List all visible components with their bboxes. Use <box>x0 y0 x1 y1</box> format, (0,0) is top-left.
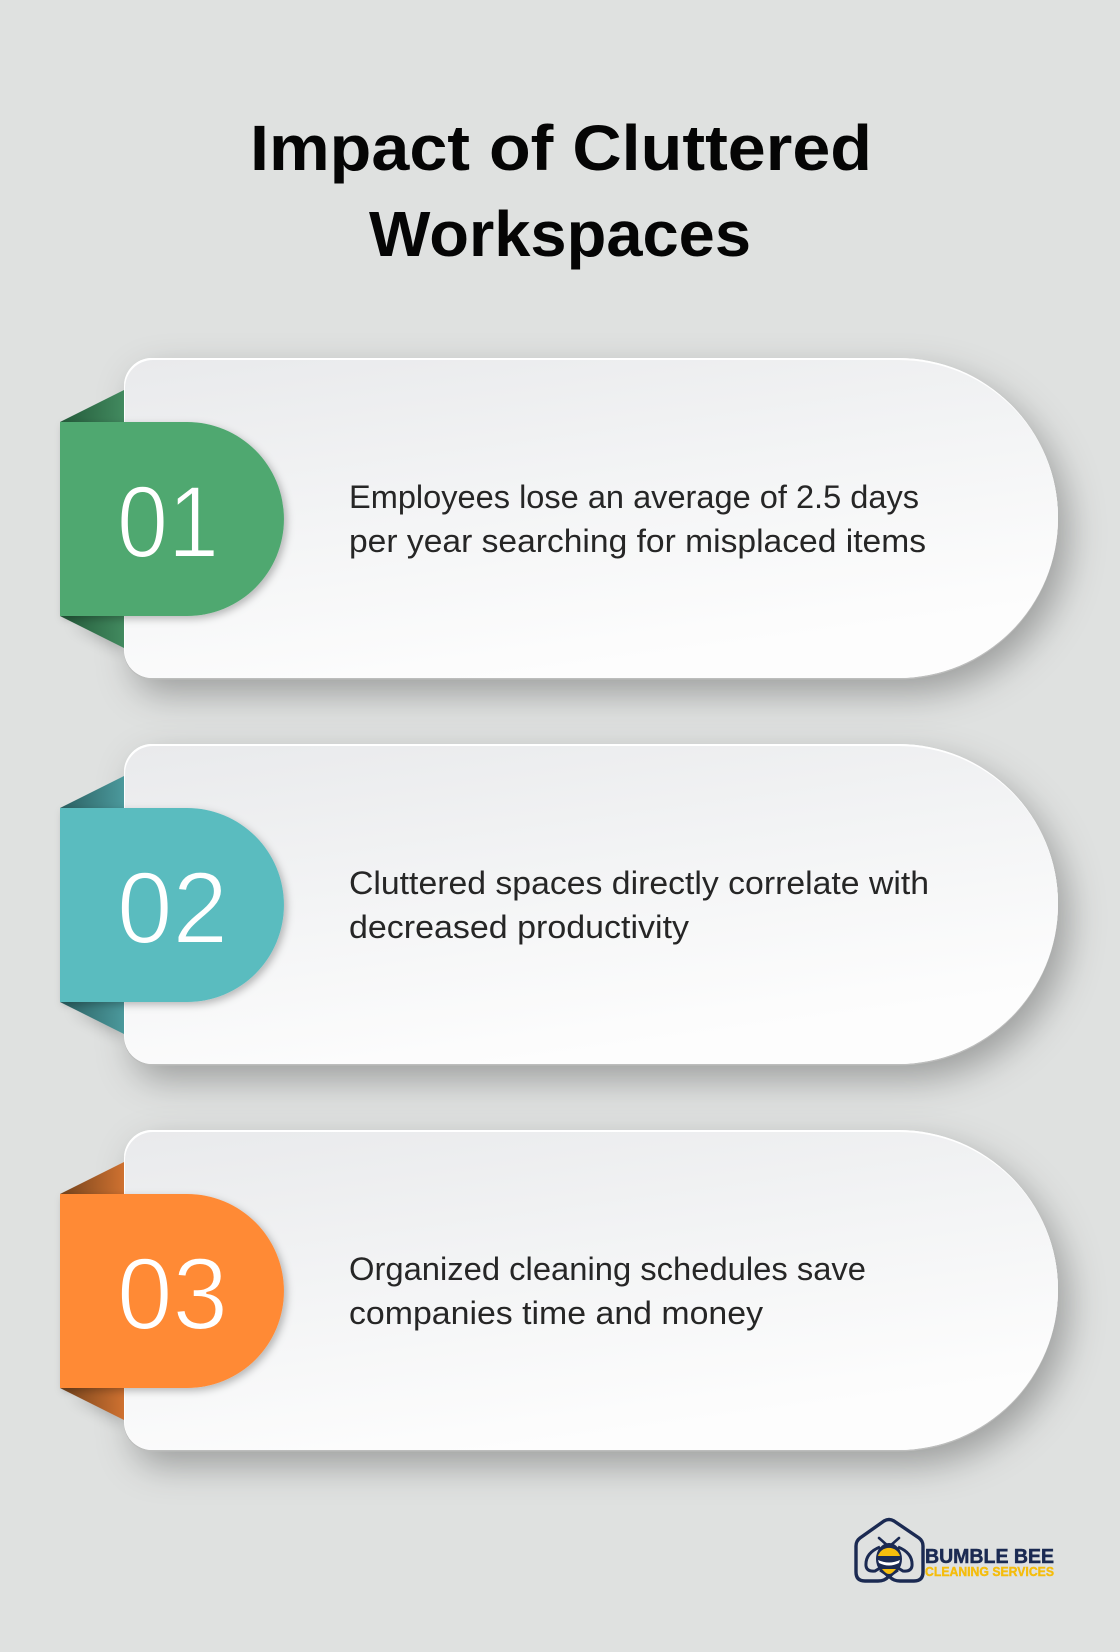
text block 03: Organized cleaning schedules save <box>349 1251 866 1287</box>
text block 01: per year searching for misplaced items <box>349 523 926 559</box>
text block 03 <box>349 1251 866 1331</box>
card 03 background <box>72 1130 1059 1452</box>
number tab 02: 02 <box>117 851 228 965</box>
text block 02 <box>349 865 929 945</box>
fold: top <box>60 1162 124 1194</box>
number tab 02 <box>60 808 284 1002</box>
number tab 01: 01 <box>117 465 219 579</box>
brand tagline: CLEANING SERVICES <box>925 1565 1054 1579</box>
title <box>250 112 872 270</box>
icon: house with bee <box>856 1520 923 1581</box>
panel: card 02 <box>60 744 1059 1066</box>
card 02 background <box>72 744 1059 1066</box>
fold: top <box>60 776 124 808</box>
title: Workspaces <box>369 198 751 270</box>
text block 01 <box>349 479 926 559</box>
text block 03: companies time and money <box>349 1295 763 1331</box>
fold: bottom <box>60 616 124 648</box>
title: Impact of Cluttered <box>250 112 872 184</box>
panel: card 01 <box>60 358 1059 680</box>
fold: top <box>60 390 124 422</box>
card 01 background <box>72 358 1059 680</box>
fold: bottom <box>60 1002 124 1034</box>
panel: card 03 <box>60 1130 1059 1452</box>
brand name: BUMBLE BEE <box>925 1546 1054 1568</box>
logo: Bumble Bee Cleaning Services <box>856 1520 1054 1581</box>
text block 02: Cluttered spaces directly correlate with <box>349 865 929 901</box>
text block 01: Employees lose an average of 2.5 days <box>349 479 919 515</box>
number tab 03 <box>60 1194 284 1388</box>
text block 02: decreased productivity <box>349 909 689 945</box>
number tab 03: 03 <box>117 1237 228 1351</box>
number tab 01 <box>60 422 284 616</box>
fold: bottom <box>60 1388 124 1420</box>
